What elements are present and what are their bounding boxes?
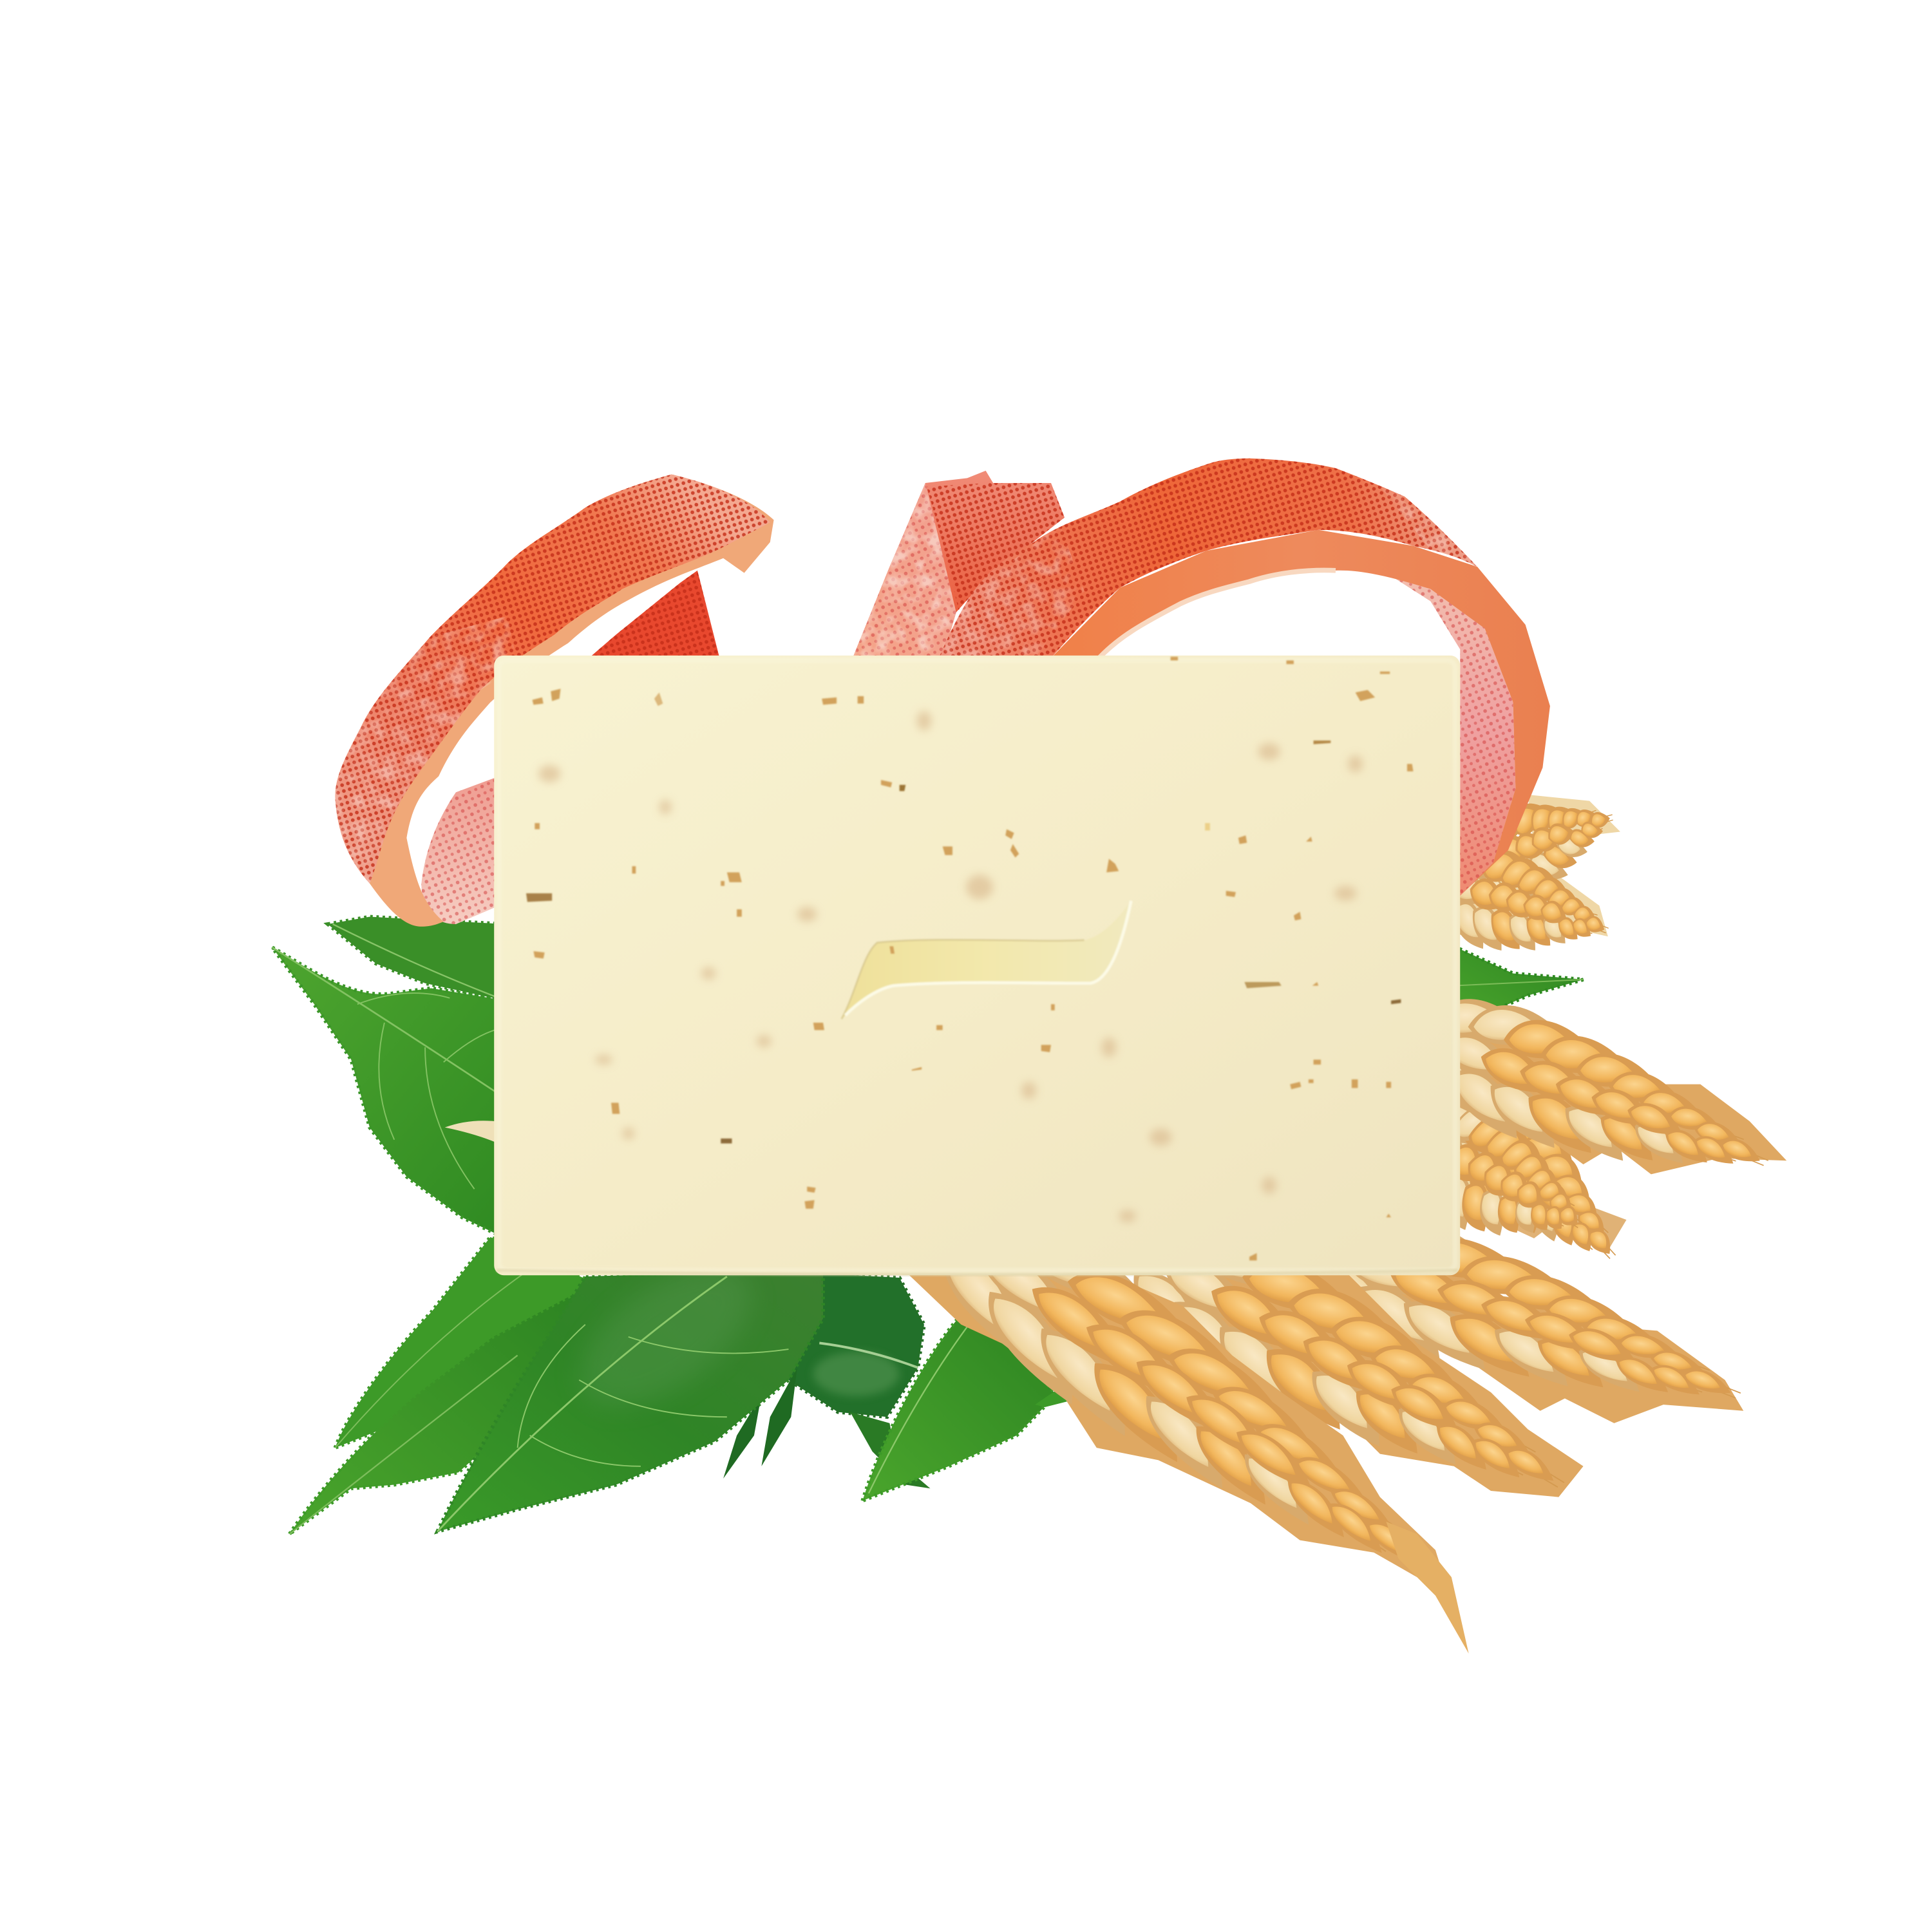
leaf: lower left long [290, 1291, 579, 1534]
peel: left back inner [421, 571, 719, 924]
sharp inclusions [526, 657, 1414, 1260]
tea leaves [272, 916, 1584, 1534]
peel: left front ribbon [335, 475, 774, 927]
leaf: tip right [1035, 1386, 1084, 1407]
leaf: right front [862, 1312, 1056, 1501]
logo impression [842, 901, 1131, 1019]
wheat spike: upper pale [1423, 756, 1634, 990]
blurred inclusions [538, 711, 1363, 1222]
wheat spike: middle bottom [1094, 1174, 1605, 1559]
leaf: large left [272, 947, 505, 1238]
wheat spike: far right bottom [1289, 1175, 1765, 1466]
peel: right inner band [1396, 569, 1515, 896]
wheat spike: left bottom long [897, 1159, 1481, 1654]
leaf: big center [437, 1240, 823, 1531]
peel: right large ribbon [939, 459, 1550, 896]
soap bevel edges [497, 661, 1457, 1274]
leaf: small right [1454, 946, 1584, 1023]
leaf: small narrow [723, 1368, 797, 1479]
wheat spike: right lower short [1377, 1027, 1667, 1311]
wheat fragment behind leaf [445, 1121, 495, 1142]
soap body [494, 656, 1460, 1275]
peel: middle ribbon [853, 471, 1065, 658]
leaf: lower back left [335, 1237, 591, 1448]
leaf: upper left small [328, 916, 505, 1001]
leaf: lower back middle [788, 1273, 931, 1488]
soap bar [494, 656, 1460, 1275]
wheat spike: right upper [1393, 963, 1794, 1233]
wheat stalks behind soap [897, 756, 1794, 1654]
grapefruit peels [335, 459, 1550, 927]
